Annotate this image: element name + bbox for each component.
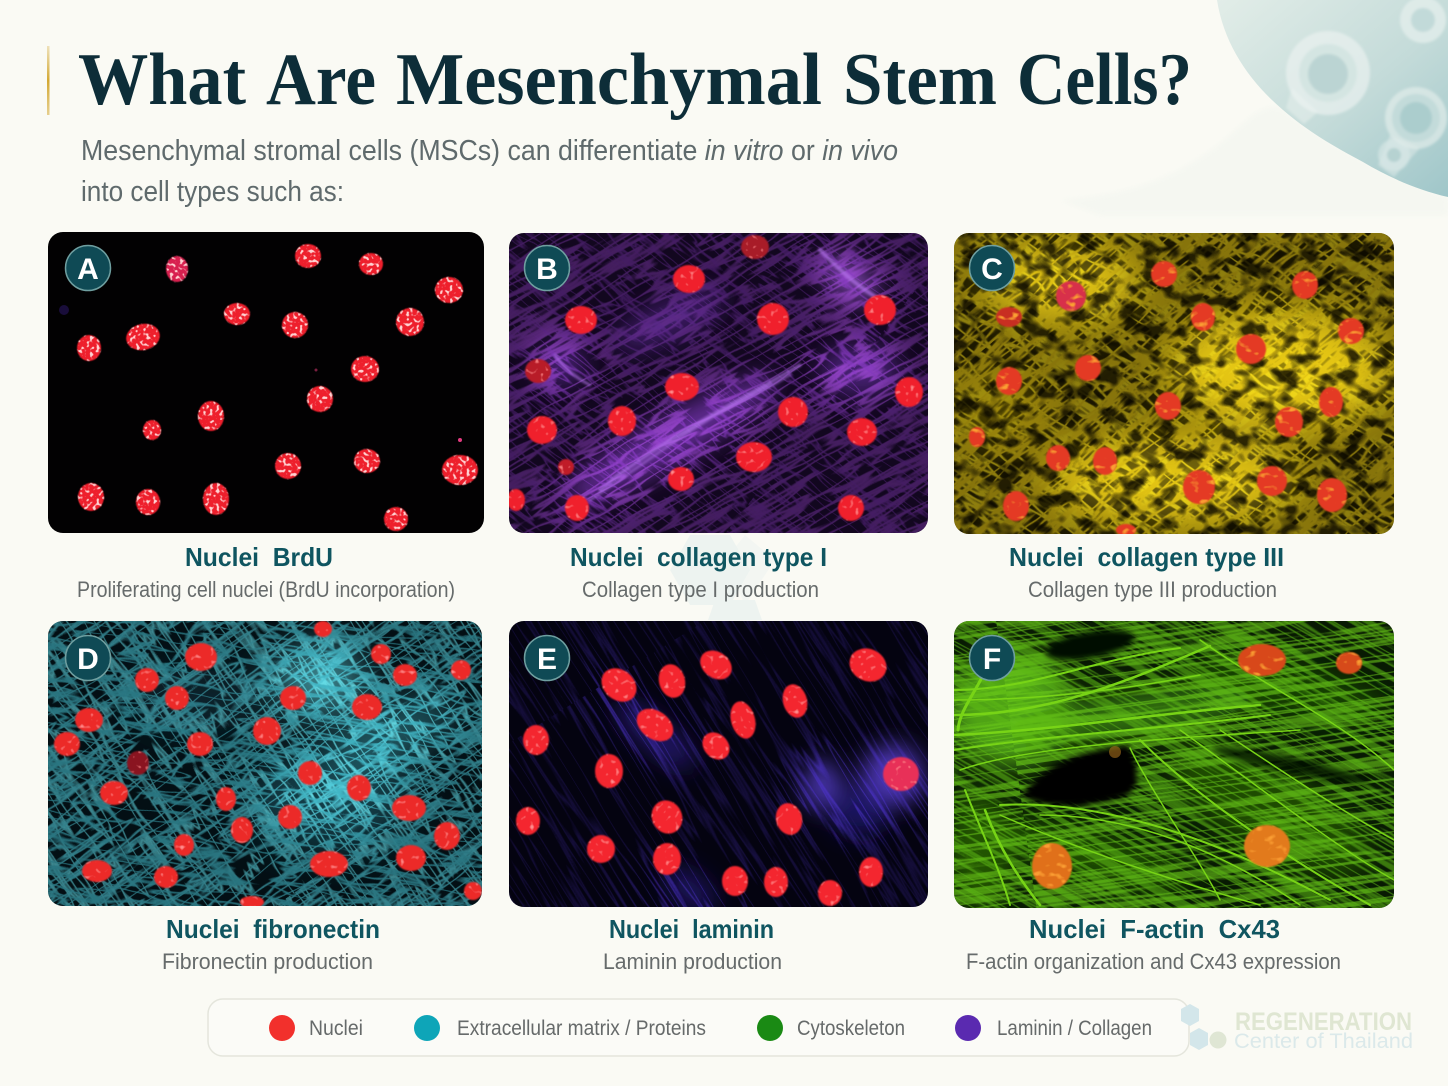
legend item: extracellular matrix: Extracellular matrix / Proteins [457,1017,706,1040]
micrograph D [48,621,482,908]
badge E: E [537,643,557,676]
logo watermark: Center of Thailand [1234,1030,1413,1053]
badge B [524,246,570,290]
bright fibre bundles [555,250,890,500]
caption text E: Laminin production [603,949,782,974]
title accent bar [47,46,50,115]
caption text D: Fibronectin production [162,949,373,974]
title [78,39,1192,121]
legend item: nuclei [269,1015,363,1041]
micrograph C [954,233,1394,536]
legend item: laminin / collagen [955,1015,1152,1041]
badge B: B [536,253,558,286]
caption heading E: Nuclei laminin [609,914,774,944]
title: What [78,39,246,121]
caption heading F: Nuclei F-actin Cx43 [1029,914,1280,944]
caption text F: F-actin organization and Cx43 expression [966,949,1341,974]
badge C [970,246,1014,290]
panel F: F-actin and Cx43 [950,621,1394,974]
title: Mesenchymal [396,39,822,121]
micrograph B [507,233,928,533]
caption text C: Collagen type III production [1028,577,1277,602]
badge F [970,636,1014,680]
caption text B: Collagen type I production [582,577,819,602]
caption heading D: Nuclei fibronectin [166,914,380,944]
title: Are [266,39,376,121]
panel A: BrdU [48,232,484,602]
badge E [524,636,570,680]
logo watermark: REGENERATION [1235,1008,1412,1036]
title: Cells? [1017,39,1192,121]
caption heading C: Nuclei collagen type III [1009,542,1284,572]
badge A [66,246,110,290]
logo watermark [1181,1004,1413,1053]
panel E: laminin [509,621,928,974]
legend item: cytoskeleton [757,1015,905,1041]
badge D: D [77,643,99,676]
decorative cell artwork, top right [1060,0,1448,215]
subtitle: into cell types such as: [81,176,344,208]
micrograph A [48,232,484,533]
caption heading A: Nuclei BrdU [185,542,333,572]
micrograph F [950,621,1394,910]
subtitle: Mesenchymal stromal cells (MSCs) can differentiate in vitro or in vivo [81,135,898,167]
badge D [66,636,110,680]
panel D: fibronectin [48,621,482,974]
caption text A: Proliferating cell nuclei (BrdU incorporation) [77,577,455,602]
badge F: F [983,643,1001,676]
caption heading B: Nuclei collagen type I [570,542,827,572]
faint background watermark hexagons [670,535,775,620]
subtitle [81,135,898,208]
hand-placed fibre bundles [954,640,1394,905]
legend item: nuclei: Nuclei [309,1017,363,1040]
legend [208,999,1189,1056]
badge C: C [981,253,1003,286]
micrograph E [509,621,928,922]
legend item: cytoskeleton: Cytoskeleton [797,1017,905,1040]
legend item: laminin / collagen: Laminin / Collagen [997,1017,1152,1040]
title: Stem [843,39,997,121]
badge A: A [77,253,99,286]
panel C: collagen type III [954,233,1394,602]
panel B: collagen type I [507,233,928,602]
